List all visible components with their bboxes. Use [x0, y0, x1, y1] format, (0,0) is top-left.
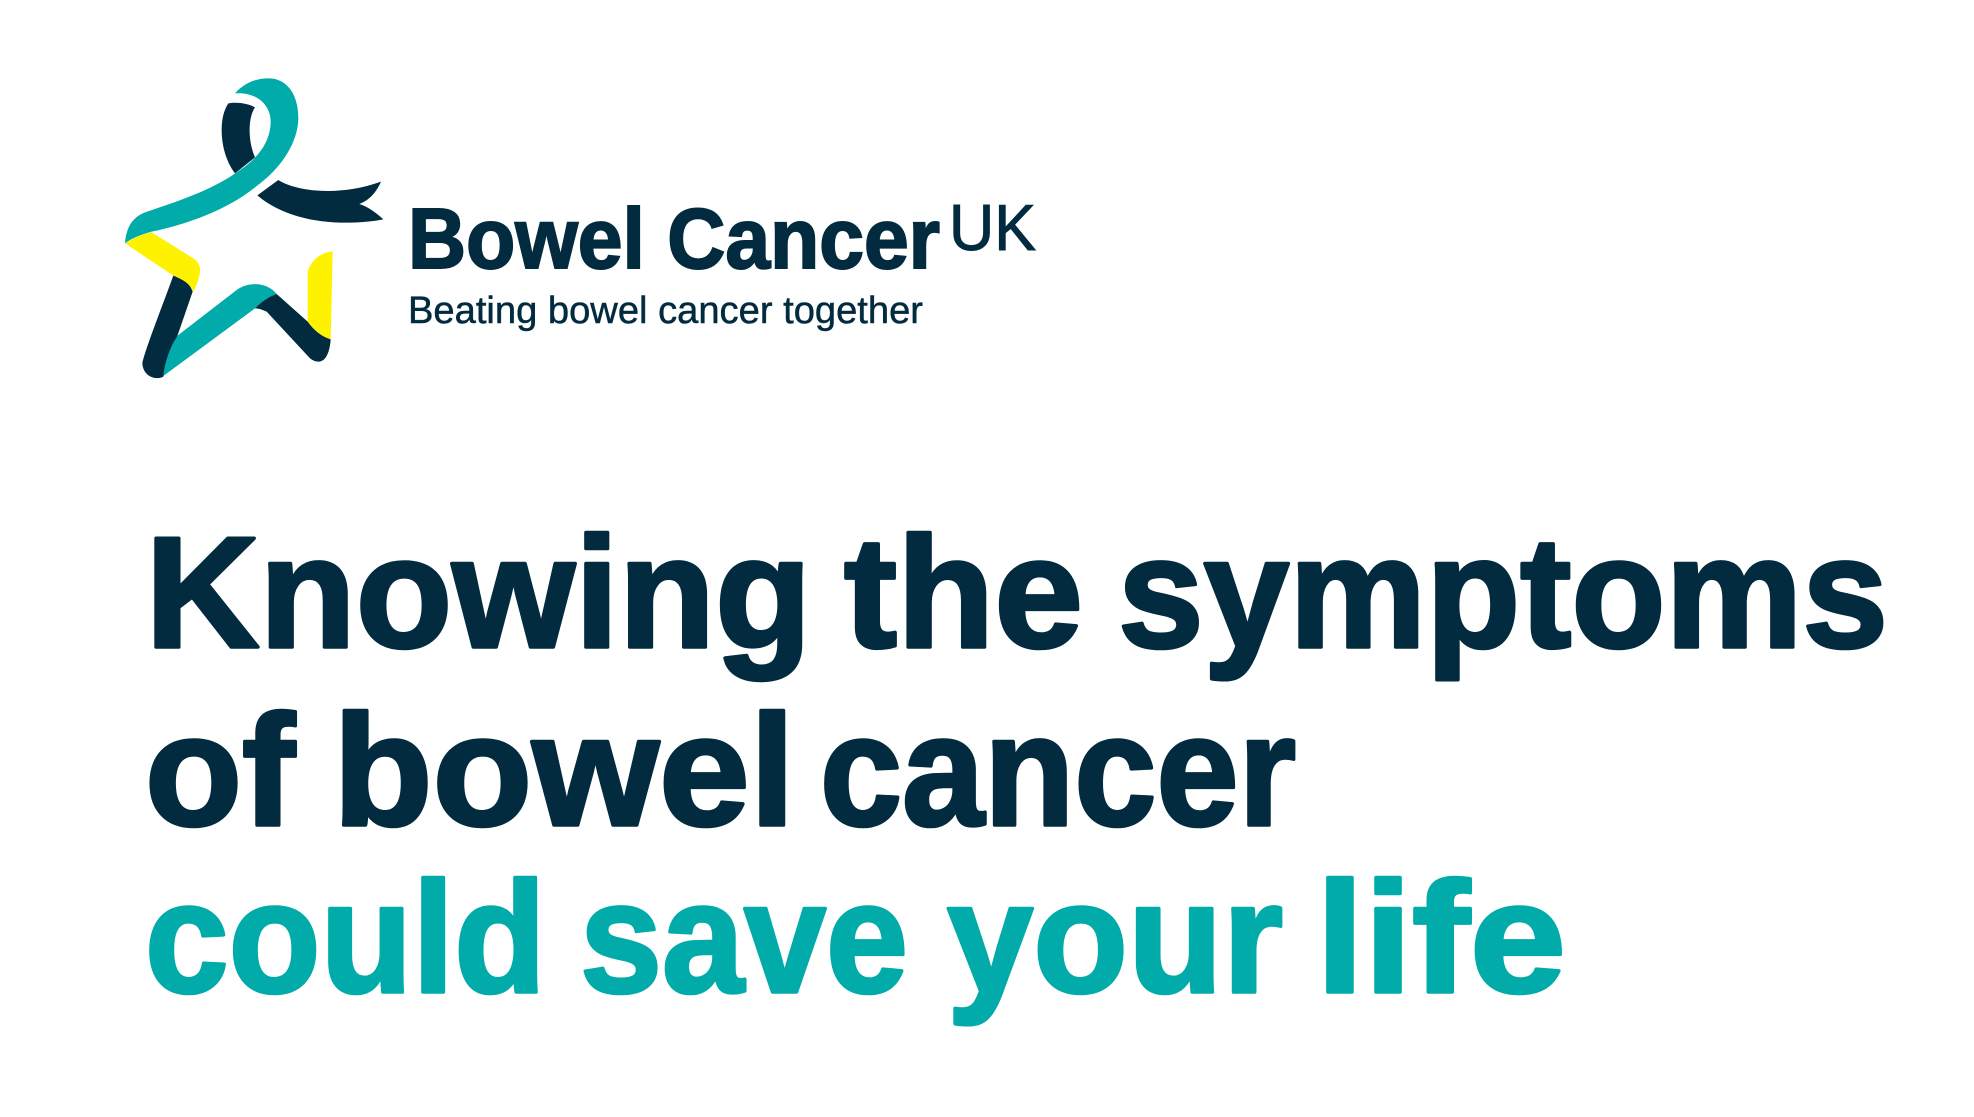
logo UK mark: UK [949, 191, 1036, 264]
title line 2: of [145, 683, 295, 859]
title line 3: teal emphasis: save [580, 850, 908, 1026]
title line 3: teal emphasis [145, 850, 1566, 1026]
title line 3: teal emphasis: your [947, 850, 1283, 1026]
title line 2: bowel [333, 683, 795, 859]
icon: ribbon star [125, 78, 383, 378]
title [145, 505, 1888, 1026]
logo: Bowel Cancer UK [125, 78, 1036, 378]
logo wordmark: Bowel Cancer [408, 192, 940, 287]
title line 2 [145, 683, 1296, 859]
title line 1: the [844, 505, 1083, 681]
title line 1: symptoms [1118, 505, 1888, 681]
title line 3: teal emphasis: could [145, 850, 546, 1026]
logo tagline: Beating bowel cancer together [408, 290, 923, 332]
title line 2: cancer [820, 683, 1296, 859]
title line 3: teal emphasis: life [1316, 850, 1566, 1026]
title line 1: Knowing [146, 505, 812, 681]
title line 1 [146, 505, 1888, 681]
